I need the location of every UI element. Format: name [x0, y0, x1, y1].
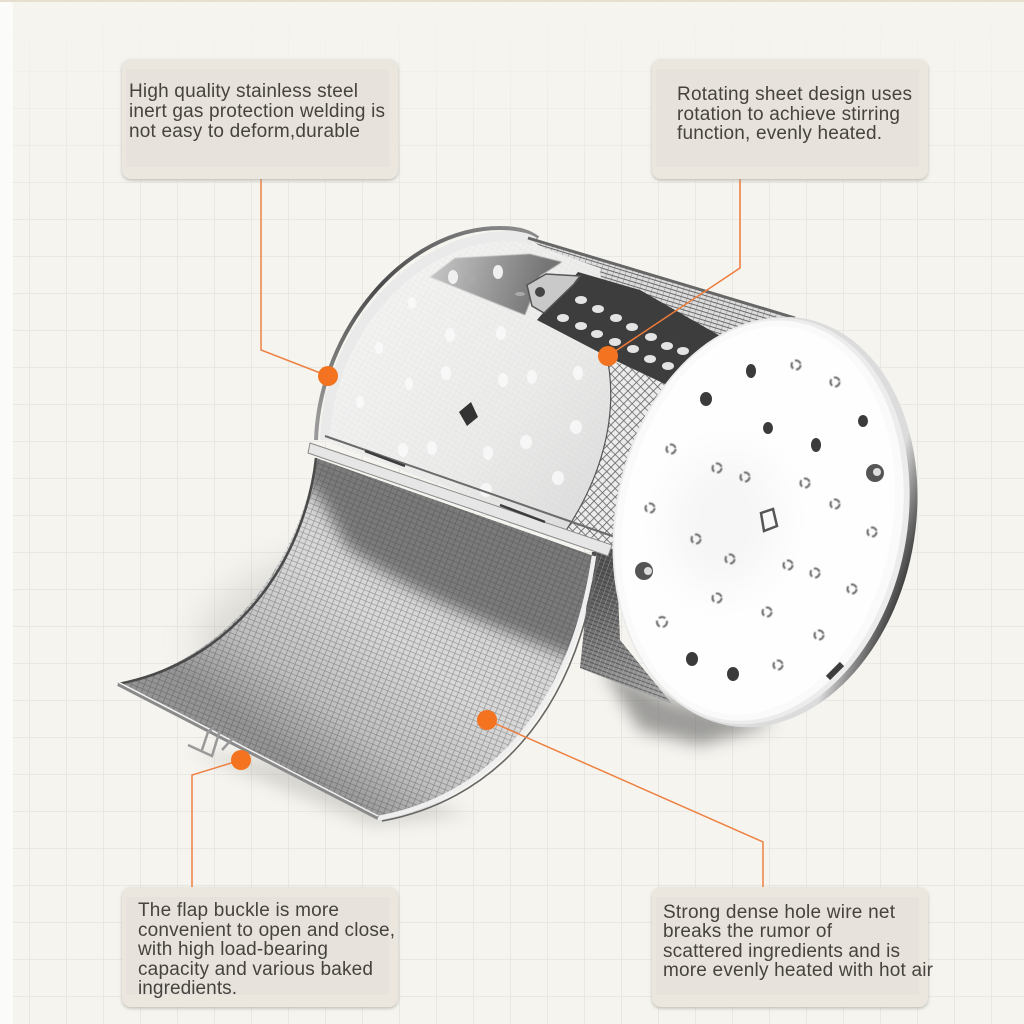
callout: rotating sheet: function, evenly heated. [677, 123, 882, 144]
callout: stainless steel welding: not easy to deform,durable [129, 121, 360, 142]
callout: flap buckle: convenient to open and close, [138, 920, 395, 941]
open mesh flap [118, 440, 610, 821]
callout: flap buckle: The flap buckle is more [138, 900, 339, 921]
flap dark inner edge [118, 458, 316, 684]
drum interior seen through the open flap [322, 238, 611, 532]
flap buckle [188, 727, 233, 756]
marker dot 2 [598, 346, 618, 366]
dark through-holes [686, 364, 868, 681]
callout: wire net: Strong dense hole wire net [663, 902, 896, 923]
drum top mesh strip [528, 238, 795, 340]
inner diamond rivet [459, 402, 478, 426]
product: rotating mesh drum [118, 228, 952, 821]
leader line 1 [261, 179, 328, 376]
callout: wire net: breaks the rumor of [663, 921, 833, 942]
callout: wire net: more evenly heated with hot air [663, 960, 934, 981]
round end plate with perforations [578, 290, 952, 754]
callout: wire net: scattered ingredients and is [663, 941, 900, 962]
rim clip [828, 664, 842, 678]
centre square mark [761, 509, 777, 531]
rounded front rim of drum [316, 228, 538, 440]
light reflecting holes [646, 360, 876, 670]
flap lower rod [118, 684, 378, 818]
leader line 2 [608, 179, 740, 356]
marker dot 3 [231, 750, 251, 770]
perforated rotating sheet [527, 272, 722, 385]
far side plate reflection [430, 254, 562, 315]
callout: flap buckle: capacity and various baked [138, 959, 373, 980]
callout: stainless steel welding [122, 59, 398, 179]
sheet bracket and rivet [527, 274, 580, 313]
mounting screws [635, 464, 884, 580]
callout: stainless steel welding: High quality stainless steel [129, 81, 358, 102]
callout: wire net [652, 887, 934, 1007]
callout: stainless steel welding: inert gas protection welding is [129, 101, 385, 122]
leader line 3 [192, 760, 241, 887]
lower rear mesh of drum [580, 548, 672, 704]
product shadows [178, 527, 775, 825]
callout: flap buckle: with high load-bearing [137, 939, 328, 960]
flap curved right rim [378, 556, 594, 818]
side mesh between interior and end plate [565, 360, 682, 550]
flap dark zone near hinge [307, 458, 594, 665]
callout: rotating sheet: Rotating sheet design uses [677, 84, 912, 105]
callout: rotating sheet [652, 59, 928, 179]
marker dot 1 [318, 366, 338, 386]
callout: flap buckle: ingredients. [138, 978, 237, 999]
marker dot 4 [477, 710, 497, 730]
leader line 4 [487, 720, 763, 887]
callout: flap buckle [122, 887, 398, 1007]
hinge bar [308, 436, 615, 556]
callout: rotating sheet: rotation to achieve stirring [677, 104, 900, 125]
